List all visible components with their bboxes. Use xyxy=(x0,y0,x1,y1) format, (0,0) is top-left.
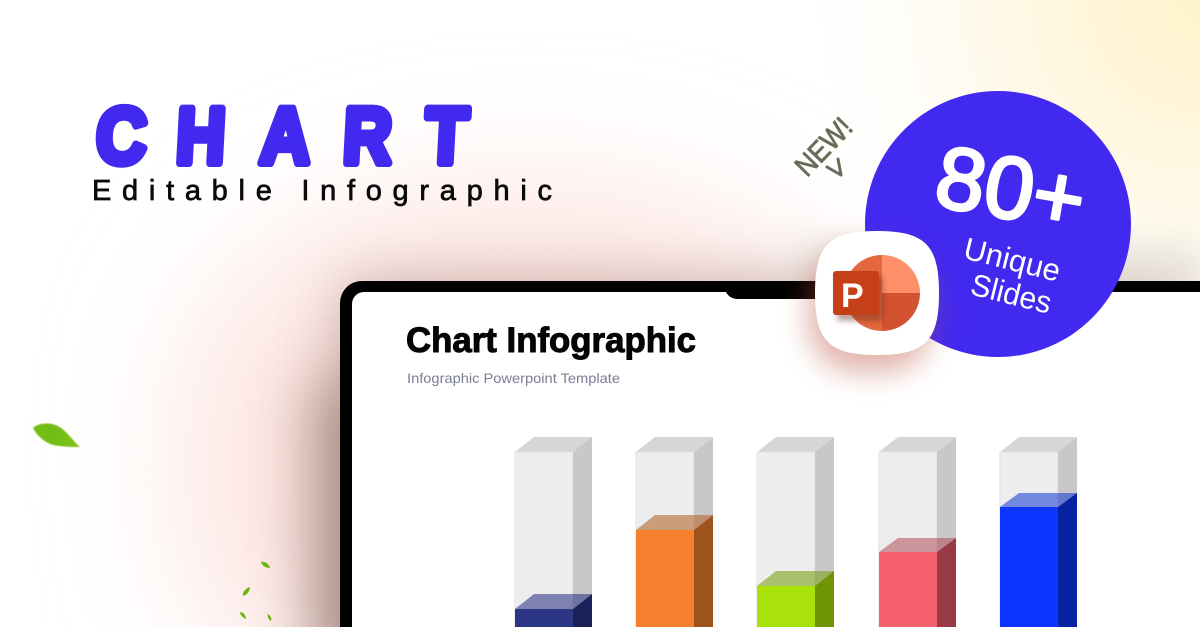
icon: large green leaf xyxy=(33,424,80,447)
bar 4: coral xyxy=(879,437,956,627)
title: CHART xyxy=(94,91,470,180)
title: CHART: C xyxy=(94,92,149,180)
bar 2: orange xyxy=(636,437,713,627)
title: CHART: R xyxy=(341,92,394,180)
subtitle: Editable Infographic: Editable Infographic xyxy=(92,175,552,207)
callout: NEW!: NEW! xyxy=(789,112,859,183)
slide heading: Chart Infographic xyxy=(406,321,696,360)
badge label xyxy=(960,231,1064,321)
badge label: Slides xyxy=(967,267,1055,321)
title: CHART: A xyxy=(258,92,313,180)
icon letter P: P xyxy=(841,277,864,315)
laptop frame xyxy=(340,281,1200,627)
bar 3: lime xyxy=(757,437,834,627)
bar 1: navy xyxy=(515,437,592,627)
badge label: Unique xyxy=(960,231,1064,289)
icon: small falling leaves xyxy=(240,562,271,621)
badge: 80+ unique slides xyxy=(865,91,1131,357)
title: CHART: T xyxy=(423,92,470,180)
bar 5: blue xyxy=(1000,437,1077,627)
icon: PowerPoint app tile xyxy=(808,231,939,373)
badge number: 80+ xyxy=(929,126,1093,250)
slide subheading: Infographic Powerpoint Template xyxy=(407,370,620,386)
3D bar chart xyxy=(515,437,1077,627)
title: CHART: H xyxy=(174,91,228,180)
